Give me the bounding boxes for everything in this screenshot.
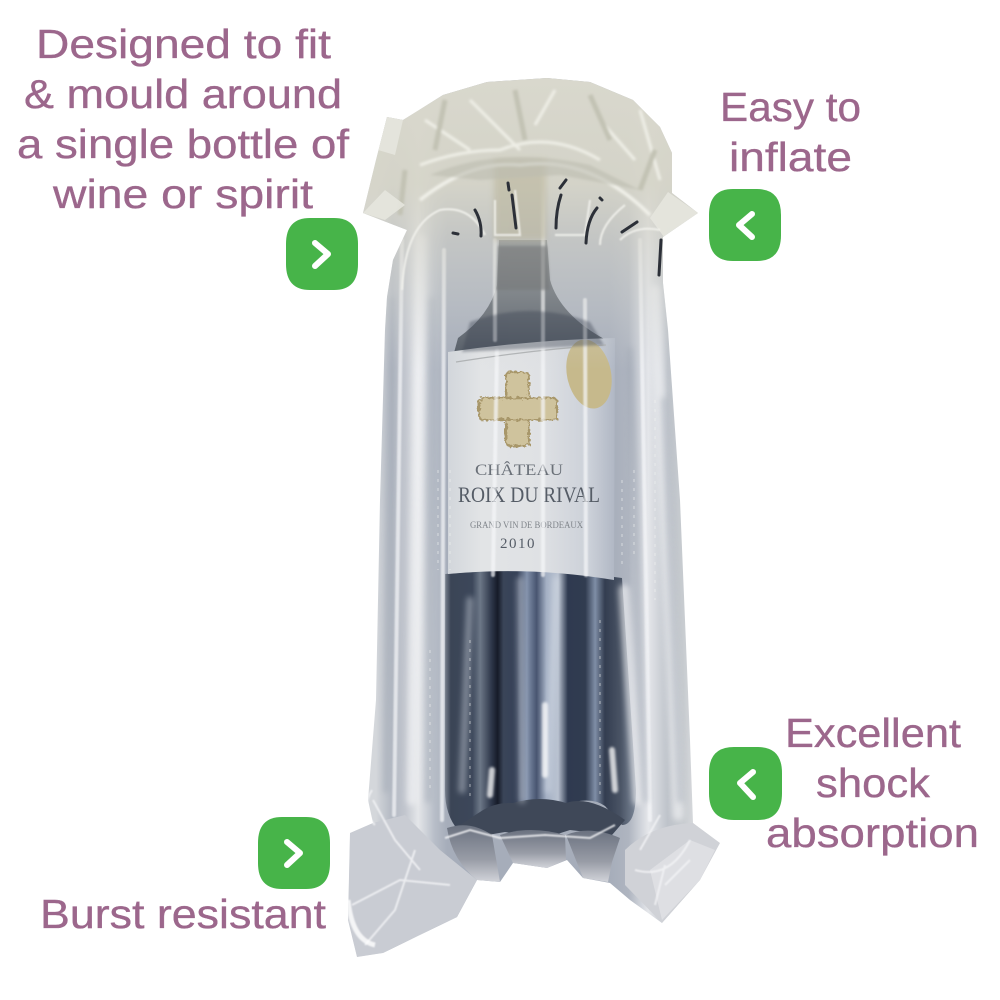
film edge shine at left bottom bbox=[348, 900, 375, 945]
bottle base band bbox=[472, 799, 625, 835]
refracted bottle base lobes bbox=[447, 825, 620, 882]
bottom film flap left bbox=[348, 815, 477, 957]
bottle lower body bbox=[445, 571, 636, 830]
wine bottle neck and shoulders bbox=[454, 240, 603, 352]
top fade: beige film above bottle bbox=[363, 78, 698, 351]
label text: vintage: 2010 bbox=[500, 536, 536, 552]
text: single bottle: a single bottle of bbox=[17, 121, 350, 167]
sparkles on film bbox=[430, 400, 655, 800]
gold cross emblem bbox=[479, 372, 557, 446]
inflated collar folds bbox=[400, 90, 660, 215]
wine label bbox=[448, 335, 618, 580]
product photo: air column bag with wine bottle bbox=[340, 70, 730, 970]
label border line bbox=[456, 345, 606, 362]
text: inflate: inflate bbox=[729, 134, 852, 180]
icon: green arrow left, bottom right bbox=[709, 747, 782, 820]
icon: green arrow left, top right bbox=[709, 189, 781, 261]
tube top edges bbox=[402, 190, 660, 290]
text: mould around: & mould around bbox=[24, 71, 342, 117]
text: designed to fit: Designed to fit bbox=[36, 21, 332, 67]
wine capsule tint bbox=[494, 160, 546, 240]
callout: burst resistant: Burst resistant bbox=[40, 891, 327, 937]
label text: Grand vin de Bordeaux: GRAND VIN DE BORDEAUX bbox=[470, 521, 583, 531]
callout: excellent shock absorption bbox=[766, 710, 979, 856]
bag body bbox=[340, 70, 730, 970]
text: absorption: absorption bbox=[766, 810, 979, 856]
shoulder shadow bbox=[462, 311, 604, 352]
air column highlights bbox=[386, 160, 680, 820]
gold medal seal bbox=[566, 340, 612, 408]
text: wine or spirit: wine or spirit bbox=[52, 171, 314, 217]
bottom film creases bbox=[352, 790, 690, 945]
callout: easy to inflate bbox=[720, 84, 861, 180]
text: excellent: Excellent bbox=[785, 710, 962, 756]
callout: designed to fit bbox=[17, 21, 350, 217]
text: easy to: Easy to bbox=[720, 84, 861, 130]
label text: Château: CHÂTEAU bbox=[475, 460, 564, 479]
inflation valves bbox=[453, 180, 661, 275]
icon: green arrow right, bottom left bbox=[258, 817, 330, 889]
label text: Roix du Rival: ROIX DU RIVAL bbox=[458, 482, 600, 507]
text: shock: shock bbox=[816, 760, 931, 806]
icon: green arrow right, top left bbox=[286, 218, 358, 290]
bottom film lobes right bbox=[625, 823, 720, 923]
side flaps bbox=[363, 117, 698, 237]
neck seen through film bbox=[496, 246, 550, 290]
